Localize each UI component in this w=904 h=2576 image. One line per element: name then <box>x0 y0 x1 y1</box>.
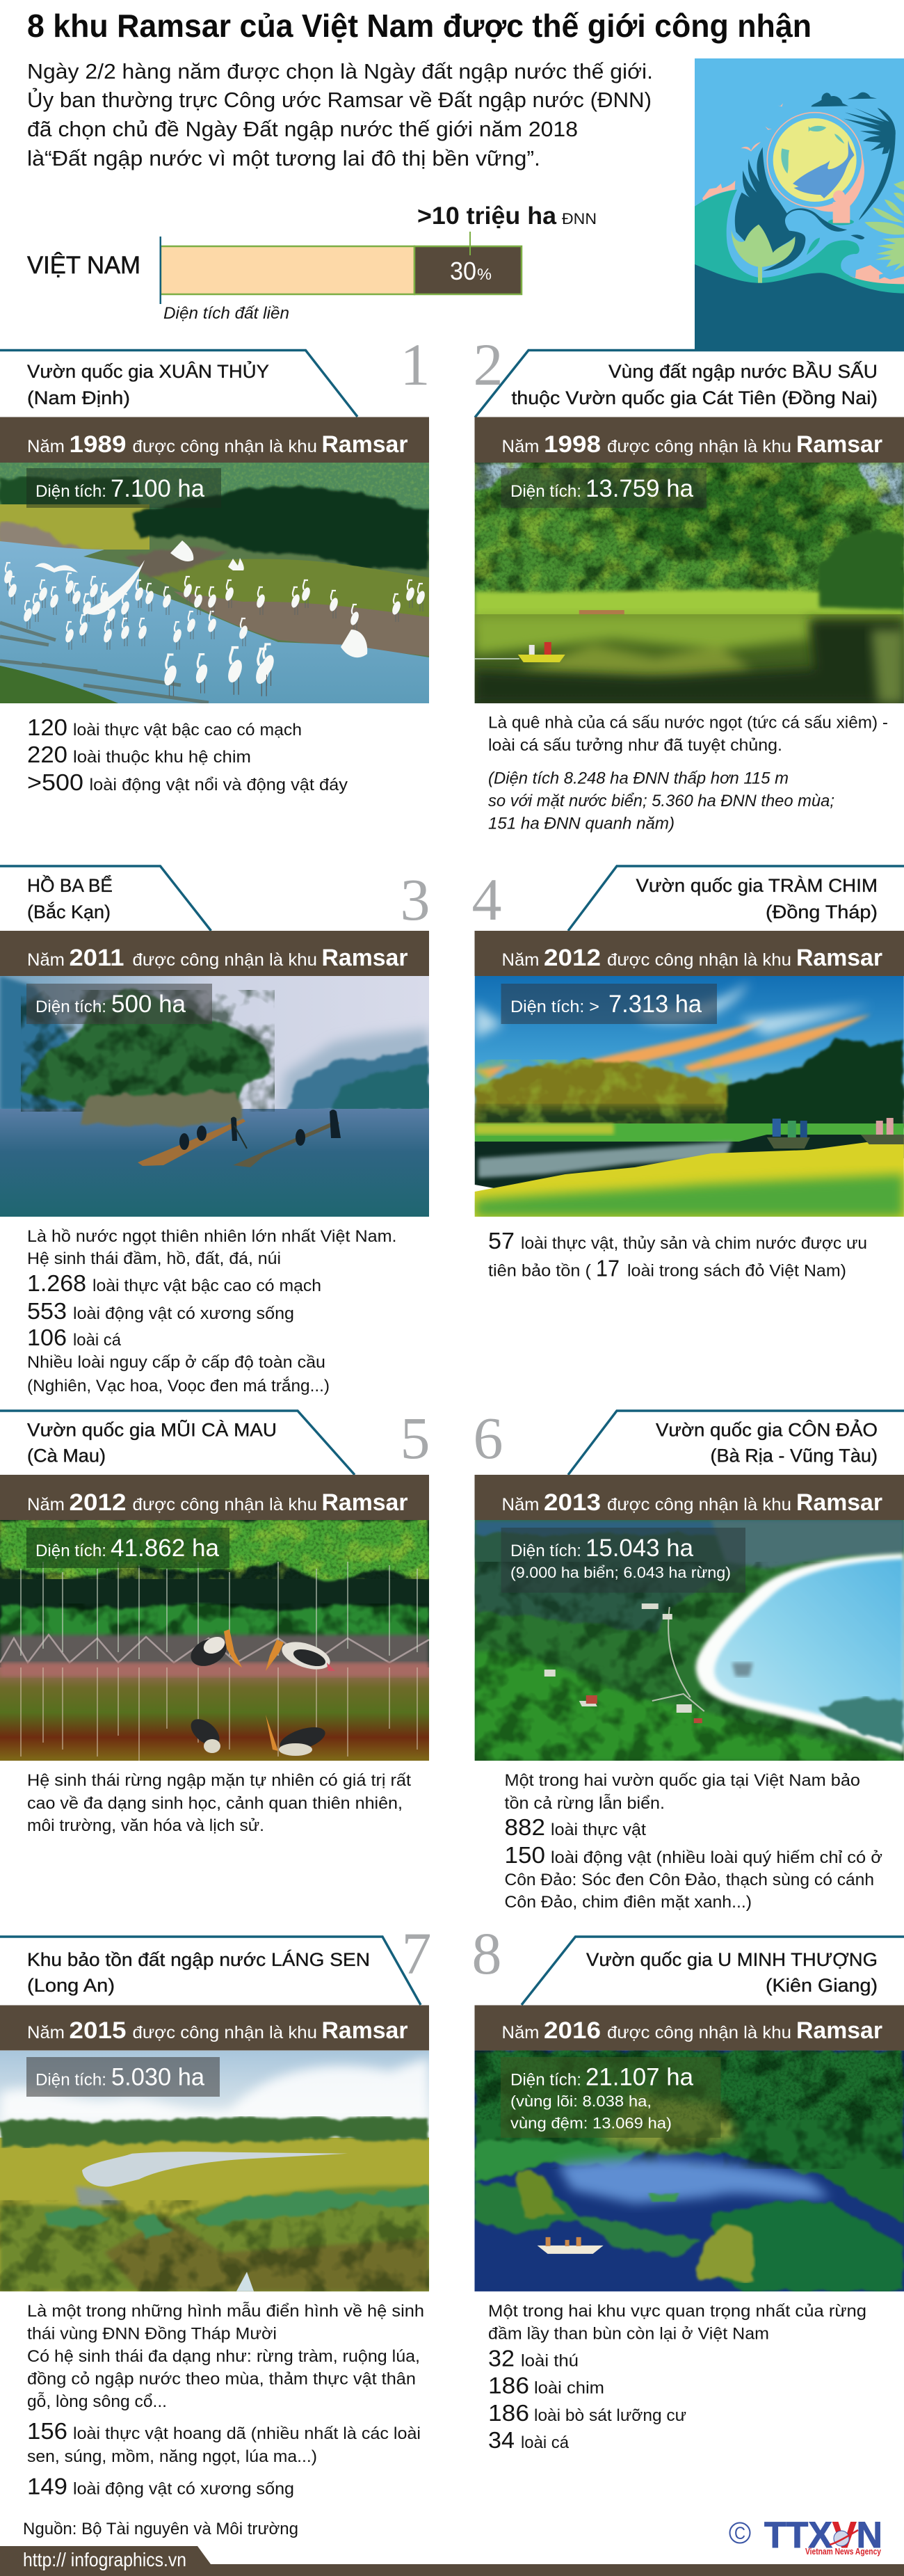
facts list: loài thực vật hoang dã (nhiều nhất là các loài <box>73 2424 421 2443</box>
year band: 2015 <box>70 2017 127 2044</box>
leader line <box>469 232 471 255</box>
intro text block: Ủy ban thường trực Công ước Ramsar về Đất ngập nước (ĐNN) <box>27 87 652 112</box>
facts list: 149 <box>27 2474 67 2499</box>
heading: site name: Vườn quốc gia U MINH THƯỢNG <box>586 1949 878 1970</box>
area callout <box>26 1528 229 1568</box>
photo: U Minh Thuong forest and water <box>474 2051 904 2291</box>
facts list: loài động vật (nhiều loài quý hiếm chỉ có ở <box>551 1848 882 1867</box>
bar: land area <box>161 246 414 294</box>
area callout: (vùng lõi: 8.038 ha, <box>510 2093 652 2110</box>
year band <box>0 417 429 463</box>
copyright mark <box>730 2522 750 2543</box>
facts list: 150 <box>505 1842 545 1868</box>
value: 30% <box>450 257 492 285</box>
panel heading outline <box>0 351 357 417</box>
year band <box>0 2005 429 2051</box>
area callout <box>501 1528 745 1593</box>
facts list <box>27 2302 424 2499</box>
heading: site name: (Kiên Giang) <box>766 1975 878 1996</box>
facts list: loài trong sách đỏ Việt Nam) <box>627 1262 846 1280</box>
facts list: Hệ sinh thái đầm, hồ, đất, đá, núi <box>27 1249 281 1268</box>
panel heading outline <box>522 1937 904 2005</box>
year band: Ramsar <box>321 1489 407 1516</box>
year band <box>0 931 429 976</box>
facts list: đồng cỏ ngập nước theo mùa, thảm thực vật thân <box>27 2369 416 2389</box>
photo: Con Dao bay aerial view <box>474 1520 904 1761</box>
year band <box>0 1475 429 1520</box>
heading: site name <box>512 360 878 408</box>
agency name: Vietnam News Agency <box>805 2546 882 2557</box>
facts list: Côn Đảo: Sóc đen Côn Đảo, thạch sùng có cánh <box>505 1871 874 1889</box>
facts list: 220 <box>27 742 67 767</box>
year band: Năm <box>502 950 540 970</box>
heading: site name: (Bà Rịa - Vũng Tàu) <box>711 1446 878 1466</box>
description: loài cá sấu tưởng như đã tuyệt chủng. <box>488 736 782 755</box>
boats and figures <box>138 1110 341 1167</box>
boat <box>538 2237 604 2254</box>
panel: site 7 Lang Sen <box>0 1920 431 2499</box>
facts list: >500 <box>27 769 83 795</box>
facts list: 882 <box>505 1814 545 1840</box>
year band <box>474 931 904 976</box>
heading: site name: Vườn quốc gia TRÀM CHIM <box>636 875 878 896</box>
year band: Năm <box>502 437 540 456</box>
heading: site name: thuộc Vườn quốc gia Cát Tiên (Đồng Nai) <box>512 387 878 408</box>
panel heading outline <box>568 1411 904 1475</box>
area callout: 5.030 ha <box>111 2063 205 2091</box>
globe emblem <box>830 2530 858 2546</box>
panel: site 8 U Minh Thuong <box>471 1920 904 2453</box>
description: môi trường, văn hóa và lịch sử. <box>27 1816 264 1835</box>
area callout: 7.313 ha <box>608 991 702 1018</box>
facts list: 106 <box>27 1325 67 1350</box>
facts list: đầm lầy than bùn còn lại ở Việt Nam <box>488 2325 769 2343</box>
facts list: loài thực vật bậc cao có mạch <box>92 1277 321 1295</box>
year band: 2011 <box>70 945 124 971</box>
facts list <box>488 1228 867 1281</box>
facts list <box>488 2302 866 2453</box>
area callout: Diện tích: <box>35 1542 106 1560</box>
heading: site name: Vườn quốc gia XUÂN THỦY <box>27 360 269 382</box>
year band: Năm <box>502 1495 540 1514</box>
source note: Nguồn: Bộ Tài nguyên và Môi trường <box>23 2520 298 2538</box>
area callout: Diện tích: <box>510 1542 581 1560</box>
year band: 2012 <box>544 945 601 971</box>
footer band with website: http:// infographics.vn <box>23 2549 186 2570</box>
panel: site 2 Bau Sau <box>473 331 904 833</box>
facts list: loài động vật nổi và động vật đáy <box>89 776 348 794</box>
panel heading outline <box>0 1937 421 2005</box>
facts list: 1.268 <box>27 1270 86 1296</box>
facts list: 34 <box>488 2427 515 2453</box>
facts list: 186 <box>488 2372 529 2399</box>
facts list: loài chim <box>534 2379 604 2397</box>
intro text block: là“Đất ngập nước vì một tương lai đô thị bền vững”. <box>27 146 540 170</box>
heading: site name: Vườn quốc gia MŨI CÀ MAU <box>27 1419 277 1440</box>
heading: site name: (Long An) <box>27 1975 115 1996</box>
area callout: 13.759 ha <box>586 475 694 502</box>
year band: Năm <box>27 950 65 970</box>
facts list: 553 <box>27 1298 67 1324</box>
copyright mark: C <box>734 2524 745 2543</box>
heading: site name <box>586 1949 878 1996</box>
year band: được công nhận là khu <box>132 950 317 970</box>
description: cao về đa dạng sinh học, cảnh quan thiên nhiên, <box>27 1794 403 1813</box>
facts list: tiên bảo tồn ( <box>488 1262 591 1280</box>
facts list <box>505 1771 882 1912</box>
facts list: 17 <box>596 1255 620 1281</box>
year band: Ramsar <box>321 431 407 458</box>
facts list: 32 <box>488 2346 515 2371</box>
facts list: sen, súng, mồm, năng ngọt, lúa ma...) <box>27 2447 317 2466</box>
panel: site 1 Xuan Thuy <box>0 331 430 795</box>
heading: site name <box>656 1418 878 1466</box>
area callout: vùng đệm: 13.069 ha) <box>510 2115 672 2131</box>
year band: 1989 <box>70 431 127 458</box>
facts list: loài thực vật, thủy sản và chim nước được ưu <box>521 1234 867 1253</box>
facts list: loài cá <box>73 1331 122 1350</box>
facts list: Một trong hai vườn quốc gia tại Việt Nam bảo <box>505 1771 860 1790</box>
heading: site name <box>27 360 269 408</box>
facts list: Có hệ sinh thái đa dạng như: rừng tràm, ruộng lúa, <box>27 2347 420 2366</box>
facts list: Một trong hai khu vực quan trọng nhất của rừng <box>488 2302 866 2321</box>
area callout: Diện tích: <box>510 2070 581 2090</box>
panel heading outline <box>475 351 904 417</box>
year band: 1998 <box>544 431 601 458</box>
photo: Lang Sen wetland <box>0 2051 429 2291</box>
year band <box>474 2005 904 2051</box>
panel heading outline <box>0 1411 355 1475</box>
area callout <box>501 468 707 508</box>
illustration: World Wetlands Day poster <box>695 58 904 351</box>
area callout <box>26 468 221 508</box>
panel: site 5 Mui Ca Mau <box>0 1405 430 1835</box>
photo: forest and lake <box>474 463 904 703</box>
year band: Ramsar <box>796 945 882 971</box>
axis tick <box>160 237 161 304</box>
area callout: Diện tích: <box>35 482 106 501</box>
area callout: 21.107 ha <box>586 2063 694 2091</box>
year band: được công nhận là khu <box>132 1495 317 1514</box>
number 2: 2 <box>473 331 503 398</box>
area callout: 41.862 ha <box>111 1535 220 1562</box>
value: 30%: 30 <box>450 257 476 285</box>
facts list <box>27 714 348 795</box>
year band: Năm <box>27 437 65 456</box>
heading: site name: (Nam Định) <box>27 387 130 408</box>
boats <box>767 1118 904 1149</box>
year band: Ramsar <box>796 1489 882 1516</box>
facts list: (Nghiên, Vạc hoa, Voọc đen má trắng...) <box>27 1377 330 1395</box>
facts list: 186 <box>488 2400 529 2426</box>
photo: egrets on the river <box>0 463 429 703</box>
label: Viet Nam: VIỆT NAM <box>27 252 140 279</box>
area callout: 7.100 ha <box>111 475 205 502</box>
year band: Năm <box>502 2023 540 2042</box>
intro text block <box>27 59 653 170</box>
area callout: 15.043 ha <box>586 1535 694 1562</box>
area callout: Diện tích: <box>510 482 581 501</box>
heading: site name: (Đồng Tháp) <box>766 902 878 922</box>
facts list: loài động vật có xương sống <box>73 1304 294 1323</box>
description <box>27 1771 411 1835</box>
year band: được công nhận là khu <box>132 437 317 456</box>
number 4: 4 <box>471 866 502 933</box>
facts list: gỗ, lòng sông cổ... <box>27 2392 167 2411</box>
year band: 2013 <box>544 1489 601 1516</box>
facts list: Côn Đảo, chim điên mặt xanh...) <box>505 1893 752 1912</box>
photo: mangrove forest with storks <box>0 1520 429 1761</box>
facts list: loài thuộc khu hệ chim <box>73 748 251 767</box>
facts list: Là hồ nước ngọt thiên nhiên lớn nhất Việt Nam. <box>27 1227 396 1246</box>
heading: site name <box>27 1949 370 1996</box>
area callout <box>501 2057 720 2138</box>
facts list: Là một trong những hình mẫu điển hình về hệ sinh <box>27 2302 424 2321</box>
panel: site 4 Tram Chim <box>471 866 904 1281</box>
heading: site name: Vùng đất ngập nước BẦU SẤU <box>608 360 878 382</box>
number 7: 7 <box>402 1920 431 1987</box>
facts list: loài cá <box>521 2433 570 2452</box>
description: 151 ha ĐNN quanh năm) <box>488 814 675 833</box>
facts list: thái vùng ĐNN Đồng Tháp Mười <box>27 2325 277 2343</box>
number 1: 1 <box>401 331 430 398</box>
facts list: loài động vật có xương sống <box>73 2479 294 2499</box>
description: Là quê nhà của cá sấu nước ngọt (tức cá sấu xiêm) - <box>488 714 888 732</box>
photo: Ba Be lake with island and boats <box>0 976 429 1217</box>
facts list: loài bò sát lưỡng cư <box>534 2406 686 2425</box>
footer band with website <box>0 2546 904 2576</box>
area callout: Diện tích: > <box>510 998 599 1016</box>
description: so với mặt nước biển; 5.360 ha ĐNN theo mùa; <box>488 792 834 810</box>
year band: được công nhận là khu <box>607 950 791 970</box>
facts list <box>27 1227 396 1395</box>
year band: được công nhận là khu <box>607 2023 791 2042</box>
intro text block: đã chọn chủ đề Ngày Đất ngập nước thế giới năm 2018 <box>27 117 578 141</box>
area callout: (9.000 ha biển; 6.043 ha rừng) <box>510 1564 731 1581</box>
area callout: Diện tích: <box>35 998 106 1016</box>
area callout <box>501 984 717 1024</box>
storks <box>186 1629 335 1756</box>
area callout: 500 ha <box>111 991 186 1018</box>
panel heading outline <box>0 866 211 931</box>
bar: wetland share 30% <box>414 246 522 294</box>
logo: TTXVN Vietnam News Agency <box>730 2515 882 2557</box>
bar chart: wetlands share of Vietnam land area <box>27 202 597 323</box>
heading: site name: Khu bảo tồn đất ngập nước LÁNG SEN <box>27 1949 370 1970</box>
boat <box>475 642 565 662</box>
heading: site name: (Cà Mau) <box>27 1446 106 1466</box>
number 8: 8 <box>471 1920 502 1987</box>
caption: land area: Diện tích đất liền <box>163 304 289 323</box>
area callout <box>26 2057 220 2097</box>
year band: 2016 <box>544 2017 601 2044</box>
heading: site name: Vườn quốc gia CÔN ĐẢO <box>656 1418 878 1440</box>
number 3: 3 <box>401 866 430 933</box>
panel heading outline <box>568 866 904 931</box>
facts list: loài thú <box>521 2351 579 2371</box>
number 5: 5 <box>401 1405 430 1471</box>
description <box>488 714 888 833</box>
facts list: 120 <box>27 714 67 740</box>
year band <box>474 417 904 463</box>
description: (Diện tích 8.248 ha ĐNN thấp hơn 115 m <box>488 769 789 787</box>
title: 8 khu Ramsar của Việt Nam được thế giới công nhận <box>27 8 812 44</box>
panel: site 6 Con Dao <box>473 1405 904 1912</box>
year band: Ramsar <box>796 2017 882 2044</box>
year band: 2012 <box>70 1489 127 1516</box>
heading: site name <box>27 1419 277 1466</box>
value: >10 million ha: ĐNN <box>562 210 597 227</box>
facts list: 156 <box>27 2418 67 2444</box>
facts list: tồn cả rừng lẫn biển. <box>505 1794 665 1813</box>
intro text block: Ngày 2/2 hàng năm được chọn là Ngày đất ngập nước thế giới. <box>27 59 653 83</box>
facts list: 57 <box>488 1228 515 1254</box>
facts list: loài thực vật bậc cao có mạch <box>73 721 302 739</box>
year band: Năm <box>27 2023 65 2042</box>
description: Hệ sinh thái rừng ngập mặn tự nhiên có giá trị rất <box>27 1771 411 1790</box>
value: 30%: % <box>477 265 492 283</box>
year band: được công nhận là khu <box>607 437 791 456</box>
heading: site name <box>636 875 878 922</box>
year band: Năm <box>27 1495 65 1514</box>
year band: Ramsar <box>321 2017 407 2044</box>
area callout <box>26 984 212 1024</box>
heading: site name: (Bắc Kạn) <box>27 901 111 922</box>
year band: được công nhận là khu <box>607 1495 791 1514</box>
value: >10 million ha: >10 triệu ha <box>417 202 557 230</box>
facts list: loài thực vật <box>551 1821 646 1839</box>
panel: site 3 Ba Be lake <box>0 866 430 1395</box>
area callout: Diện tích: <box>35 2070 106 2090</box>
heading: site name <box>27 874 113 922</box>
year band <box>474 1475 904 1520</box>
facts list: Nhiều loài nguy cấp ở cấp độ toàn cầu <box>27 1353 325 1372</box>
year band: Ramsar <box>796 431 882 458</box>
year band: Ramsar <box>321 945 407 971</box>
heading: site name: HỒ BA BỂ <box>27 874 113 896</box>
year band: được công nhận là khu <box>132 2023 317 2042</box>
photo: Tram Chim landscape at sunset <box>474 976 904 1217</box>
wordmark: TTXVN <box>764 2515 882 2556</box>
number 6: 6 <box>473 1405 503 1471</box>
